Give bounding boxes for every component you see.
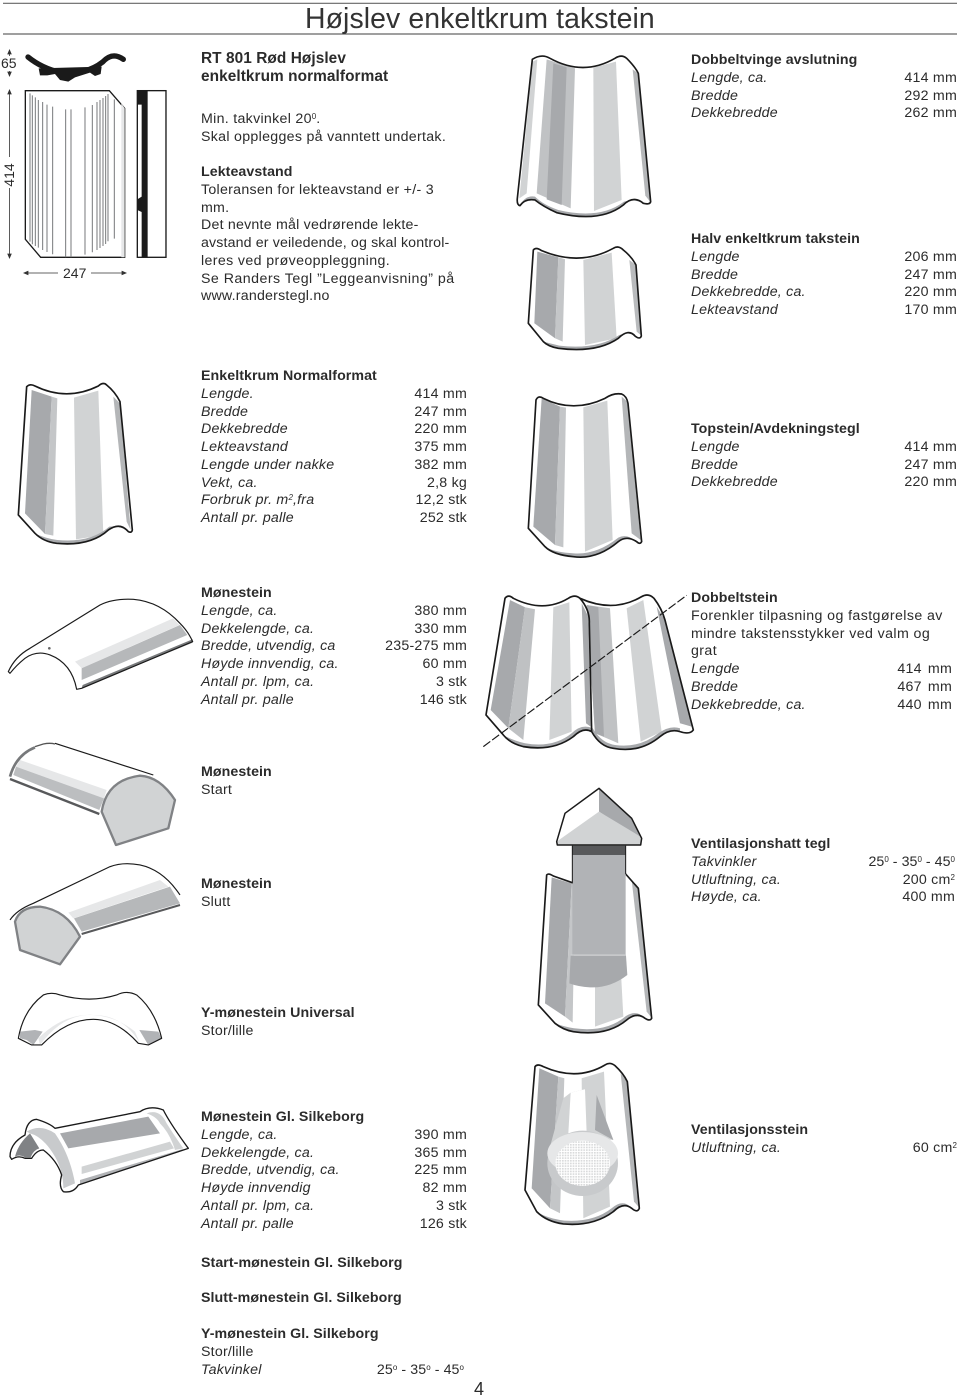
text: roof pitch [201,111,446,145]
spec: Topstein/Avdekningstegl: Bredde [691,456,738,472]
illustration: mønestein [8,599,193,689]
spec: Halv enkeltkrum takstein: Halv enkeltkrum takstein [691,231,860,247]
spec: Halv enkeltkrum takstein: Lekteavstand [691,302,778,318]
spec: Enkeltkrum Normalformat: Lekteavstand [201,439,288,455]
spec: Y-mønestein Gl. Silkeborg: 25o - 35o - 45o [377,1362,464,1378]
spec: Ventilasjonshatt tegl: 250 - 350 - 450 [868,854,955,870]
spec: Dobbeltstein: 440 mm [897,696,952,712]
spec: Ventilasjonsstein: Ventilasjonsstein [691,1122,808,1138]
text: roof pitch: Skal opplegges på vanntett undertak. [201,129,446,145]
text block: Lekteavstand [201,164,455,304]
spec: Mønestein Start: Mønestein [201,764,272,780]
illustration: mønestein slutt [10,864,180,965]
spec: Mønestein Gl. Silkeborg: 390 mm [414,1127,467,1143]
spec: Halv enkeltkrum takstein: 206 mm [904,249,957,265]
spec: Dobbeltstein: Dekkebredde, ca. [691,696,806,712]
spec: Mønestein Gl. Silkeborg: Mønestein Gl. Silkeborg [201,1109,364,1125]
spec: Enkeltkrum Normalformat: 2,8 kg [427,474,467,490]
spec: Enkeltkrum Normalformat: 12,2 stk [416,492,467,508]
dimension label: 414: 414 [1,163,17,187]
text block: Lekteavstand: Det nevnte mål vedrørende lekte- [201,217,419,233]
illustration: dobbeltstein [483,595,693,749]
text block: Lekteavstand: leres ved prøveoppleggning. [201,253,390,269]
illustration: ventilasjonsstein [525,1063,639,1224]
spec: Enkeltkrum Normalformat: 382 mm [414,457,467,473]
spec: Mønestein: 3 stk [436,674,467,690]
spec: Dobbeltstein: mindre takstensstykker ved valm og [691,626,930,642]
spec: Enkeltkrum Normalformat: Antall pr. palle [201,510,294,526]
product heading: RT 801: enkeltkrum normalformat [201,68,388,85]
spec: Ventilasjonsstein: 60 cm2 [913,1140,957,1156]
spec: Enkeltkrum Normalformat: Enkeltkrum Normalformat [201,368,377,384]
illustration: topstein tile [528,394,642,557]
spec: Y-mønestein Universal: Y-mønestein Universal [201,1005,355,1021]
spec: Mønestein Gl. Silkeborg: Antall pr. palle [201,1216,294,1232]
spec: Ventilasjonshatt tegl [691,836,955,905]
spec: Dobbeltstein: Lengde [691,661,740,677]
spec: Ventilasjonshatt tegl: 400 mm [902,889,955,905]
spec: Dobbeltstein [691,590,952,712]
spec: Mønestein Gl. Silkeborg: 126 stk [420,1216,467,1232]
spec: Mønestein: Bredde, utvendig, ca [201,638,336,654]
spec: Y-mønestein Universal [201,1005,355,1039]
spec: Dobbeltstein: Forenkler tilpasning og fastgørelse av [691,608,943,624]
illustration: ventilasjonshatt [538,788,652,1033]
text block: Lekteavstand: www.randerstegl.no [201,288,330,304]
dimension label: 247: 247 [63,265,86,281]
illustration: mønestein start [8,743,180,846]
spec: Enkeltkrum Normalformat: 252 stk [420,510,467,526]
spec: Mønestein Slutt [201,876,272,910]
spec: Mønestein Gl. Silkeborg: Bredde, utvendig, ca. [201,1162,340,1178]
spec: Ventilasjonsstein [691,1122,957,1156]
spec: Mønestein Gl. Silkeborg: 3 stk [436,1198,467,1214]
title: Højslev enkeltkrum takstein [305,3,655,35]
spec: Enkeltkrum Normalformat: 375 mm [414,439,467,455]
spec: Mønestein: 60 mm [423,656,467,672]
spec: Enkeltkrum Normalformat: 414 mm [414,386,467,402]
spec: Enkeltkrum Normalformat: Dekkebredde [201,421,288,437]
spec: Mønestein: 330 mm [414,620,467,636]
spec: Dobbeltvinge avslutning: Lengde, ca. [691,70,768,86]
spec: Dobbeltvinge avslutning: 292 mm [904,88,957,104]
product heading: RT 801: RT 801 Rød Højslev [201,50,346,67]
icon: tile cross-section profile [28,56,123,82]
spec: Ventilasjonshatt tegl: 200 cm2 [903,872,955,888]
spec: Ventilasjonsstein: Utluftning, ca. [691,1140,781,1156]
heading: Start-mønestein Gl. Silkeborg: Start-mønestein Gl. Silkeborg [201,1255,402,1271]
spec: Dobbeltvinge avslutning [691,52,957,121]
spec: Topstein/Avdekningstegl [691,421,957,490]
spec: Y-mønestein Universal: Stor/lille [201,1023,254,1039]
spec: Halv enkeltkrum takstein: 170 mm [904,302,957,318]
spec: Dobbeltvinge avslutning: Bredde [691,88,738,104]
text block: Lekteavstand: Lekteavstand [201,164,293,180]
technical drawing: tile front elevation [25,91,125,257]
spec: Dobbeltstein: 414 mm [897,661,952,677]
spec: Halv enkeltkrum takstein: Lengde [691,249,740,265]
spec: Mønestein Gl. Silkeborg: Lengde, ca. [201,1127,278,1143]
spec: Mønestein Gl. Silkeborg: Høyde innvendig [201,1180,311,1196]
heading: Slutt-mønestein Gl. Silkeborg: Slutt-mønestein Gl. Silkeborg [201,1290,402,1306]
spec: Enkeltkrum Normalformat: Vekt, ca. [201,474,258,490]
spec: Mønestein Gl. Silkeborg: 82 mm [423,1180,467,1196]
spec: Enkeltkrum Normalformat: 247 mm [414,404,467,420]
spec: Mønestein: 235-275 mm [385,638,467,654]
spec: Y-mønestein Gl. Silkeborg [201,1326,464,1378]
spec: Topstein/Avdekningstegl: 414 mm [904,439,957,455]
illustration: enkeltkrum normalformat tile [18,384,132,544]
illustration: mønestein Gl. Silkeborg [10,1108,188,1192]
spec: Ventilasjonshatt tegl: Høyde, ca. [691,889,762,905]
spec: Enkeltkrum Normalformat: Lengde. [201,386,254,402]
spec: Mønestein Slutt: Mønestein [201,876,272,892]
spec: Halv enkeltkrum takstein: Bredde [691,266,738,282]
spec: Mønestein [200,585,467,708]
spec: Halv enkeltkrum takstein [691,231,957,318]
spec: Enkeltkrum Normalformat: Bredde [201,404,248,420]
text block: Lekteavstand: Toleransen for lekteavstand er +/- 3 [201,182,434,198]
text: roof pitch: Min. takvinkel 200. [201,111,320,127]
spec: Ventilasjonshatt tegl: Takvinkler [691,854,757,870]
illustration: Y-mønestein [18,992,162,1045]
text block: Lekteavstand: avstand er veiledende, og skal kontrol- [201,235,449,251]
spec: Enkeltkrum Normalformat: 220 mm [414,421,467,437]
spec: Enkeltkrum Normalformat [200,368,467,526]
spec: Topstein/Avdekningstegl: Lengde [691,439,740,455]
technical drawing: tile side elevation [137,91,166,257]
dimension label: 65: 65 [1,55,17,71]
spec: Ventilasjonshatt tegl: Ventilasjonshatt tegl [691,836,830,852]
text block: Lekteavstand: mm. [201,200,229,216]
spec: Dobbeltvinge avslutning: Dobbeltvinge avslutning [691,52,857,68]
spec: Enkeltkrum Normalformat: Forbruk pr. m2,fra [201,492,314,508]
spec: Dobbeltvinge avslutning: Dekkebredde [691,105,778,121]
spec: Mønestein: Dekkelengde, ca. [201,620,314,636]
dimension arrows [8,50,126,275]
spec: Mønestein: 146 stk [420,692,467,708]
spec: Y-mønestein Gl. Silkeborg: Y-mønestein Gl. Silkeborg [201,1326,379,1342]
spec: Dobbeltstein: Dobbeltstein [691,590,778,606]
spec: Mønestein Start: Start [201,782,232,798]
spec: Dobbeltstein: grat [691,643,717,659]
spec: Dobbeltstein: Bredde [691,679,738,695]
spec: Mønestein: Lengde, ca. [201,603,278,619]
spec: Mønestein Start [201,764,272,798]
spec: Halv enkeltkrum takstein: 247 mm [904,266,957,282]
spec: Topstein/Avdekningstegl: Dekkebredde [691,474,778,490]
spec: Halv enkeltkrum takstein: 220 mm [904,284,957,300]
product heading: RT 801 [201,50,388,85]
spec: Mønestein Gl. Silkeborg: 225 mm [414,1162,467,1178]
spec: Topstein/Avdekningstegl: Topstein/Avdekningstegl [691,421,860,437]
spec: Mønestein: 380 mm [414,603,467,619]
text block: Lekteavstand: Se Randers Tegl ”Leggeanvisning” på [201,270,455,286]
spec: Mønestein: Antall pr. palle [201,692,294,708]
spec: Enkeltkrum Normalformat: Lengde under nakke [201,457,334,473]
spec: Mønestein: Høyde innvendig, ca. [201,656,339,672]
spec: Y-mønestein Gl. Silkeborg: Stor/lille [201,1344,254,1360]
spec: Ventilasjonshatt tegl: Utluftning, ca. [691,872,781,888]
spec: Topstein/Avdekningstegl: 220 mm [904,474,957,490]
spec: Dobbeltstein: 467 mm [897,679,952,695]
spec: Topstein/Avdekningstegl: 247 mm [904,456,957,472]
illustration: halv enkeltkrum tile [528,247,641,350]
illustration: dobbeltvinge tile [517,56,651,217]
spec: Mønestein: Mønestein [201,585,272,601]
spec: Mønestein Slutt: Slutt [201,894,230,910]
spec: Halv enkeltkrum takstein: Dekkebredde, ca. [691,284,806,300]
spec: Dobbeltvinge avslutning: 414 mm [904,70,957,86]
spec: Mønestein Gl. Silkeborg [200,1109,467,1232]
spec: Mønestein Gl. Silkeborg: 365 mm [414,1144,467,1160]
spec: Mønestein: Antall pr. lpm, ca. [201,674,314,690]
spec: Y-mønestein Gl. Silkeborg: Takvinkel [201,1362,262,1378]
spec: Dobbeltvinge avslutning: 262 mm [904,105,957,121]
spec: Mønestein Gl. Silkeborg: Antall pr. lpm, ca. [201,1198,314,1214]
spec: Mønestein Gl. Silkeborg: Dekkelengde, ca. [201,1144,314,1160]
